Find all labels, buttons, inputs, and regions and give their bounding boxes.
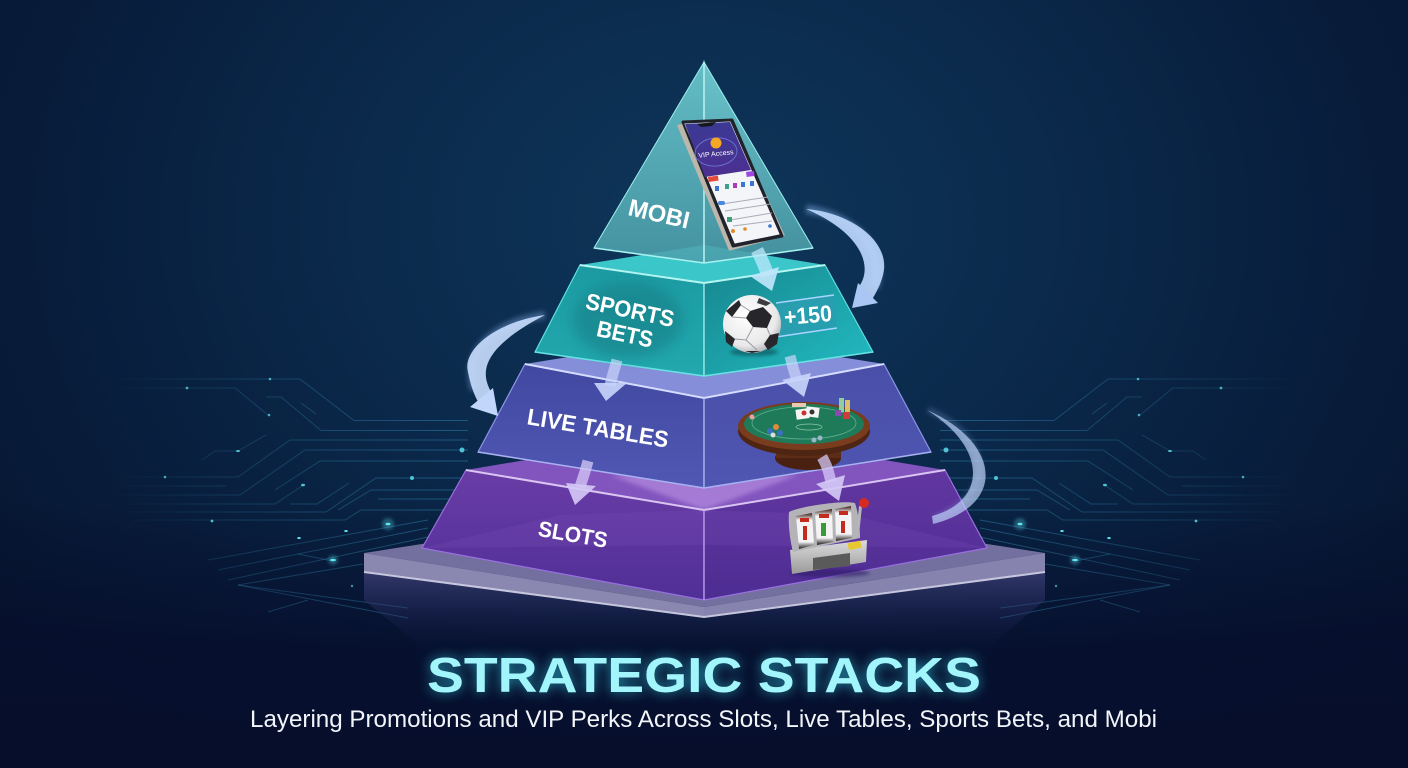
badge: +150	[776, 295, 837, 337]
title: STRATEGIC STACKS	[427, 649, 981, 703]
badge: +150: +150	[783, 300, 833, 330]
icon: slot machine	[789, 498, 870, 577]
label: sports bets: SPORTS	[583, 288, 677, 332]
icon: poker table	[738, 398, 870, 470]
arrow: sports to live right	[782, 356, 811, 397]
icon: phone: VIP Access	[698, 149, 734, 160]
label: slots: SLOTS	[536, 516, 610, 553]
icon: phone	[679, 120, 783, 249]
arrow: sports to live left	[594, 360, 627, 401]
subtitle: Layering Promotions and VIP Perks Across Slots, Live Tables, Sports Bets, and Mobi	[250, 706, 1157, 733]
arrow: left curve to live tables	[467, 315, 545, 416]
layer: slots	[422, 430, 987, 600]
circuit lines right	[940, 378, 1300, 618]
layer: mobi	[594, 62, 813, 263]
layer: live tables	[478, 335, 931, 488]
label: live tables: LIVE TABLES	[525, 403, 671, 453]
label: sports bets: BETS	[594, 315, 656, 353]
arrow: right swoosh	[927, 410, 986, 524]
arrow: live to slots left	[566, 461, 596, 505]
layer: sports bets	[535, 245, 873, 376]
title: STRATEGIC STACKS	[427, 649, 981, 703]
arrow: table to slots	[816, 457, 845, 501]
label: mobi: MOBI	[626, 194, 692, 235]
platform base	[364, 500, 1045, 650]
icon: soccer ball	[723, 295, 781, 356]
circuit lines left	[108, 378, 468, 618]
label: sports bets	[583, 288, 677, 353]
arrow: mobi curve to sports	[806, 209, 884, 308]
arrow: phone to ball	[750, 250, 779, 291]
